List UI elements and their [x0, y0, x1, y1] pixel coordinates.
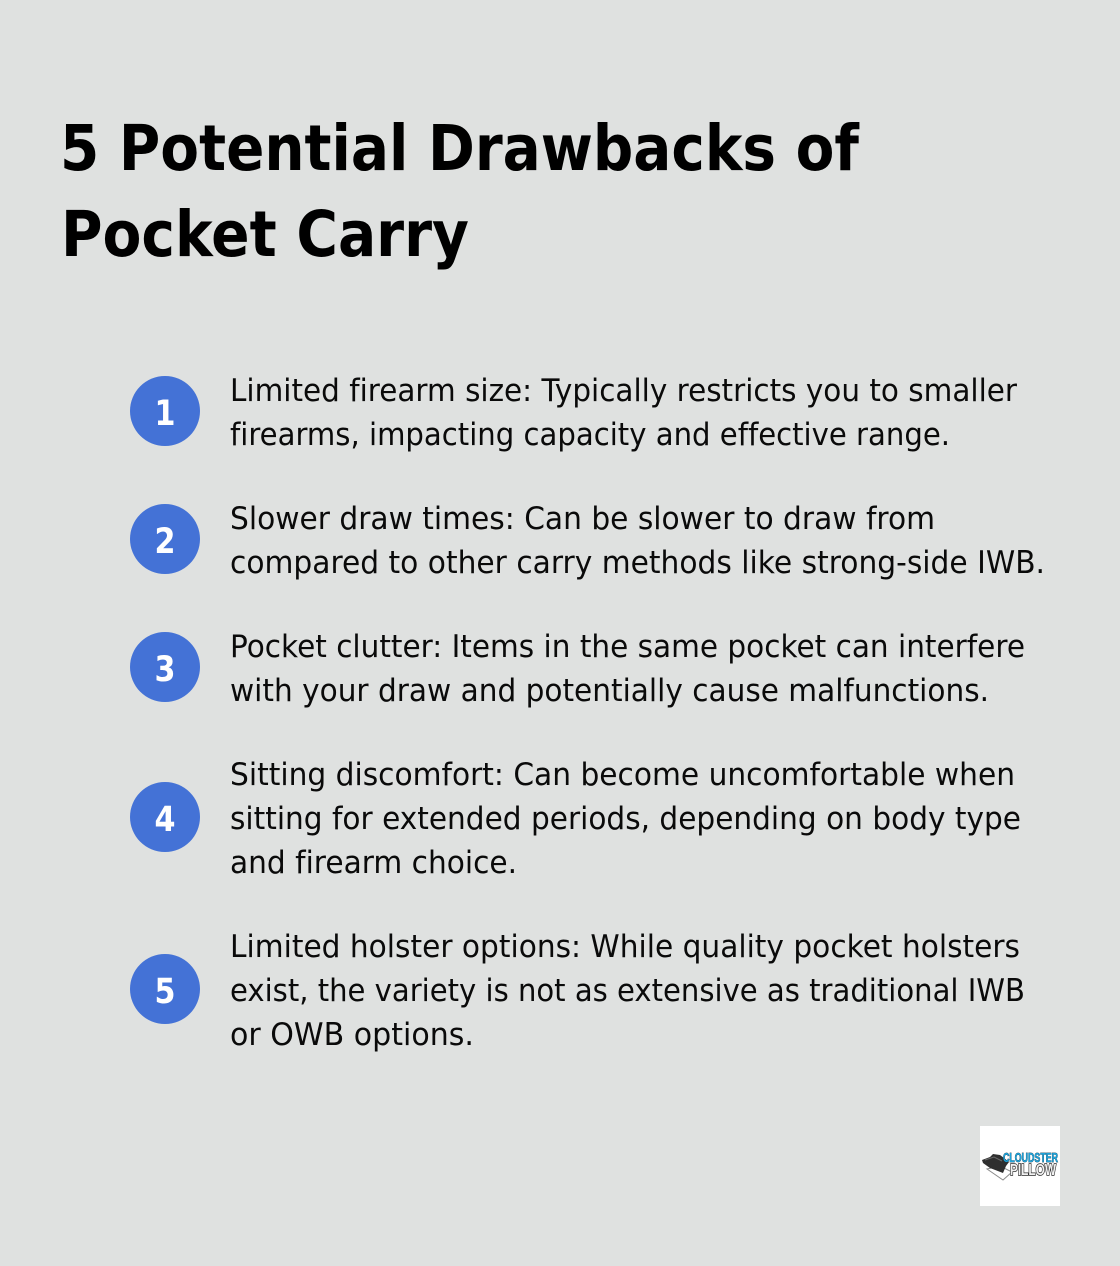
title: 5 Potential Drawbacks of — [60, 112, 860, 185]
text: limited firearm size — [230, 373, 1017, 453]
text: slower draw times — [230, 501, 1045, 581]
text: slower draw times: compared to other carry methods like strong-side IWB. — [230, 545, 1045, 581]
number badge 4: 4 — [154, 800, 176, 840]
title: Pocket Carry — [61, 198, 469, 271]
number badge 2: 2 — [154, 522, 176, 562]
text: limited holster options: Limited holster options: While quality pocket holsters — [230, 929, 1020, 965]
text: limited holster options: or OWB options. — [230, 1017, 474, 1053]
list item 5 — [130, 929, 1025, 1053]
logo wordmark: PILLOW — [1010, 1162, 1057, 1179]
text: pocket clutter — [230, 629, 1025, 709]
text: sitting discomfort — [230, 757, 1021, 881]
text: pocket clutter: Pocket clutter: Items in the same pocket can interfere — [230, 629, 1025, 665]
number badge 1 — [130, 376, 200, 446]
number badge 1: 1 — [154, 394, 176, 434]
text: limited firearm size: Limited firearm size: Typically restricts you to smaller — [230, 373, 1017, 409]
title — [60, 112, 860, 271]
text: limited firearm size: firearms, impacting capacity and effective range. — [230, 417, 950, 453]
list item 1 — [130, 373, 1017, 453]
text: slower draw times: Slower draw times: Can be slower to draw from — [230, 501, 935, 537]
number badge 3: 3 — [154, 650, 176, 690]
number badge 5: 5 — [154, 972, 176, 1012]
number badge 5 — [130, 954, 200, 1024]
logo: Cloudster Pillow — [980, 1126, 1060, 1206]
text: sitting discomfort: Sitting discomfort: Can become uncomfortable when — [230, 757, 1015, 793]
text: sitting discomfort: and firearm choice. — [230, 845, 517, 881]
text: limited holster options: exist, the variety is not as extensive as traditional IWB — [230, 973, 1025, 1009]
list item 3 — [130, 629, 1025, 709]
number badge 2 — [130, 504, 200, 574]
icon: pillow — [982, 1154, 1012, 1180]
logo wordmark — [1003, 1151, 1058, 1179]
text: limited holster options — [230, 929, 1025, 1053]
number badge 3 — [130, 632, 200, 702]
text: pocket clutter: with your draw and potentially cause malfunctions. — [230, 673, 989, 709]
number badge 4 — [130, 782, 200, 852]
logo wordmark: CLOUDSTER — [1003, 1151, 1058, 1165]
list item 2 — [130, 501, 1045, 581]
list item 4 — [130, 757, 1021, 881]
text: sitting discomfort: sitting for extended periods, depending on body type — [230, 801, 1021, 837]
